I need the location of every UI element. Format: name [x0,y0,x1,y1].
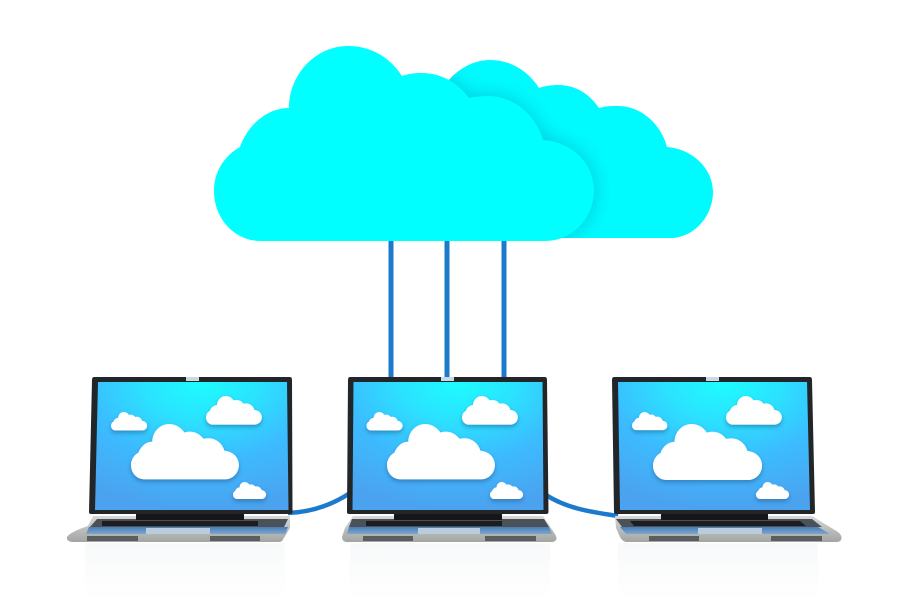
laptop: right [612,377,842,542]
laptop base [342,514,556,542]
screen clouds [111,396,266,499]
cable: cloud to centre laptop middle [444,240,450,378]
webcam [706,377,719,381]
screen [618,382,810,510]
data cables [288,240,618,516]
cable: left laptop to centre laptop [288,493,350,513]
cable: cloud to centre laptop right [502,240,506,378]
screen [95,382,288,510]
laptop base [615,514,842,542]
laptop lid and bezel [347,377,548,514]
illustration: cloud network [66,46,842,542]
cable: centre laptop to right laptop [546,495,618,516]
laptop: left [67,377,292,542]
laptop: centre [342,377,556,542]
front cloud [214,46,594,241]
screen clouds [366,396,523,499]
floor reflection [85,543,818,600]
laptop lid and bezel [612,377,815,514]
laptop lid and bezel [89,377,292,514]
cable: cloud to centre laptop left [388,240,394,378]
laptop base [67,514,290,542]
screen clouds [632,396,789,499]
webcam [186,377,199,381]
webcam [441,377,454,381]
back cloud [449,60,713,238]
screen [352,382,544,510]
